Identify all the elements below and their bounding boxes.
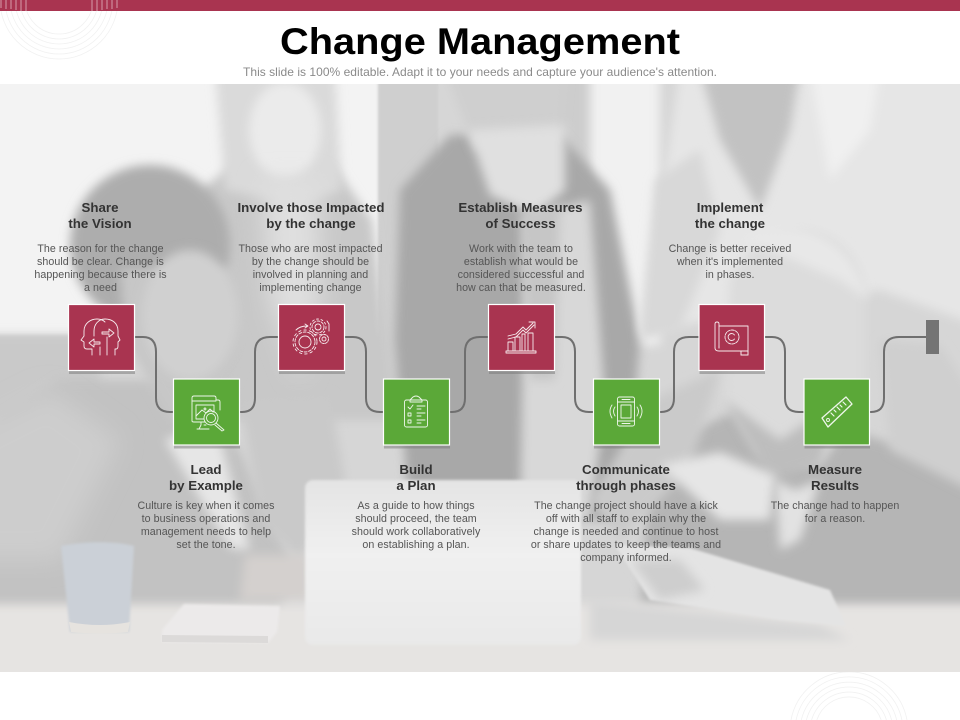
connector line xyxy=(135,337,926,412)
step 5: establish measures of success: considered successful and xyxy=(458,269,584,281)
step 8: measure results xyxy=(771,379,899,525)
step 5: establish measures of success: Establish Measures xyxy=(458,200,583,215)
top accent bar xyxy=(0,0,960,11)
step 5: establish measures of success xyxy=(456,200,586,374)
step 3: involve those impacted: by the change xyxy=(266,216,356,231)
icon: ruler xyxy=(822,397,852,427)
step 1: share the vision: should be clear. Change is xyxy=(37,256,164,268)
title: Change Management xyxy=(280,21,680,62)
step 5: establish measures of success: Work with the team to xyxy=(469,243,573,255)
step 7: implement the change: the change xyxy=(695,216,765,231)
back wall xyxy=(0,70,380,335)
step 1: share the vision: a need xyxy=(84,282,117,294)
step 4: build a plan: should proceed, the team xyxy=(355,513,477,525)
step 1: share the vision: Share xyxy=(82,200,118,215)
step 6: communicate through phases: or share updates to keep the teams and xyxy=(531,539,721,551)
step 3: involve those impacted: involved in planning and xyxy=(253,269,368,281)
step 8: measure results: for a reason. xyxy=(805,513,865,525)
icon: vibrating phone xyxy=(610,397,642,426)
step 2: lead by example: set the tone. xyxy=(176,539,236,551)
icon: heads with arrows xyxy=(81,319,120,355)
step 6: communicate through phases: Communicate xyxy=(582,462,670,477)
step 1: share the vision: the Vision xyxy=(68,216,132,231)
step 6: communicate through phases: through phases xyxy=(576,478,676,493)
step 6: communicate through phases: off with all staff to explain why the xyxy=(546,513,706,525)
step 2: lead by example: by Example xyxy=(169,478,243,493)
older man jacket xyxy=(640,400,960,610)
step 4: build a plan xyxy=(352,379,481,551)
notebook xyxy=(179,604,280,614)
step 2: lead by example: Culture is key when it comes xyxy=(137,500,275,512)
central man xyxy=(395,135,640,520)
step 1: share the vision: The reason for the change xyxy=(37,243,164,255)
step 8: measure results: The change had to happen xyxy=(771,500,899,512)
step 4: build a plan: on establishing a plan. xyxy=(362,539,470,551)
step 7: implement the change: Change is better received xyxy=(669,243,791,255)
step 2: lead by example xyxy=(137,379,275,551)
decorative rings: top left xyxy=(0,0,118,59)
step 5: establish measures of success: of Success xyxy=(485,216,556,231)
icon: gears xyxy=(293,319,329,354)
step 7: implement the change: Implement xyxy=(697,200,764,215)
step 3: involve those impacted: Those who are most impacted xyxy=(238,243,383,255)
icon: checklist clipboard xyxy=(404,396,428,427)
right woman xyxy=(667,84,960,324)
woman at left xyxy=(0,380,290,620)
step 2: lead by example: to business operations and xyxy=(142,513,270,525)
step 3: involve those impacted: Involve those Impacted xyxy=(237,200,385,215)
decorative rings: bottom right xyxy=(791,672,907,720)
step 6: communicate through phases xyxy=(531,379,721,564)
step 8: measure results: Results xyxy=(811,478,859,493)
step 3: involve those impacted xyxy=(237,200,385,374)
icon: rising bar chart xyxy=(506,322,536,353)
step 7: implement the change xyxy=(669,200,791,374)
step 5: establish measures of success: establish what would be xyxy=(464,256,578,268)
step 3: involve those impacted: implementing change xyxy=(259,282,362,294)
laptop xyxy=(305,480,581,645)
table xyxy=(0,600,960,672)
step 5: establish measures of success: how can that be measured. xyxy=(456,282,586,294)
step 4: build a plan: a Plan xyxy=(396,478,436,493)
subtitle: This slide is 100% editable. Adapt it to your needs and capture your audience's attention. xyxy=(243,65,717,79)
step 8: measure results: Measure xyxy=(808,462,862,477)
blonde woman xyxy=(204,170,383,419)
step 2: lead by example: Lead xyxy=(190,462,222,477)
step 4: build a plan: should work collaboratively xyxy=(352,526,481,538)
icon: blueprint scroll xyxy=(715,322,748,355)
step 6: communicate through phases: change is needed and continue to host xyxy=(534,526,718,538)
step 1: share the vision xyxy=(34,200,167,374)
step 7: implement the change: when it's implemented xyxy=(676,256,783,268)
hand and cuff xyxy=(660,452,775,520)
step 2: lead by example: management needs to help xyxy=(141,526,271,538)
step 1: share the vision: happening because there is xyxy=(34,269,167,281)
step 6: communicate through phases: The change project should have a kick xyxy=(534,500,718,512)
step 3: involve those impacted: by the change should be xyxy=(252,256,369,268)
step 7: implement the change: in phases. xyxy=(705,269,755,281)
connector end cap xyxy=(926,320,939,354)
decorative rings over bar xyxy=(1,0,117,11)
arm and hand xyxy=(246,422,342,550)
step 6: communicate through phases: company informed. xyxy=(580,552,672,564)
document xyxy=(617,546,837,608)
step 4: build a plan: Build xyxy=(399,462,433,477)
icon: browser and magnifier xyxy=(192,396,224,431)
step 4: build a plan: As a guide to how things xyxy=(357,500,475,512)
cup xyxy=(61,542,134,632)
